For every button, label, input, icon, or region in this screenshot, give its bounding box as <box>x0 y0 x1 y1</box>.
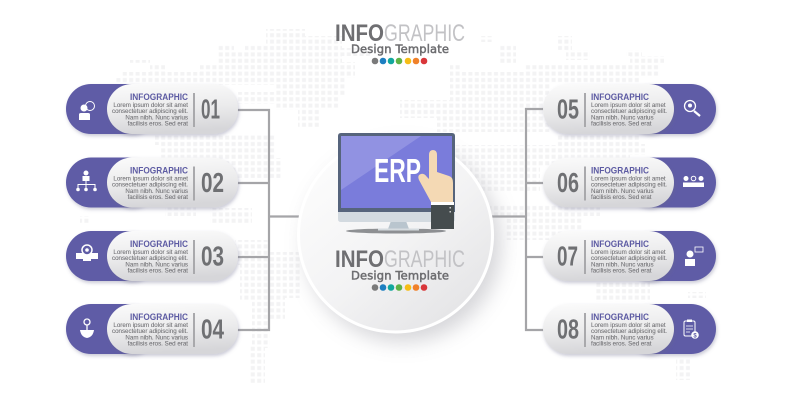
ERP label: ERP <box>374 152 421 189</box>
text block: INFOGRAPHIC <box>591 239 649 249</box>
icon: person with speech bubble <box>685 247 703 266</box>
icon: team with target <box>76 245 98 261</box>
text block <box>591 239 667 274</box>
panel: step 05 <box>543 84 716 134</box>
text block: facilisis eros. Sed erat <box>591 267 652 274</box>
title inside disc <box>335 246 465 291</box>
text block: INFOGRAPHIC <box>591 166 649 176</box>
text block: consectetuer adipiscing elit. <box>591 108 667 115</box>
title inside disc: Design Template <box>351 268 449 282</box>
panel: step 01 <box>66 84 238 134</box>
text block: consectetuer adipiscing elit. <box>112 108 188 115</box>
text block: consectetuer adipiscing elit. <box>591 182 667 188</box>
icon: clipboard with coin <box>684 320 699 339</box>
text block: Nam nibh. Nunc varius <box>591 114 654 121</box>
panel: step 02 <box>66 158 238 208</box>
connector lines: right tree <box>490 109 547 330</box>
title inside disc: GRAPHIC <box>384 246 465 273</box>
text block: Lorem ipsum dolor sit amet <box>591 176 666 182</box>
text block: Nam nibh. Nunc varius <box>591 188 654 195</box>
top title: Design Template <box>351 42 449 56</box>
text block: INFOGRAPHIC <box>130 166 188 176</box>
text block <box>112 92 188 127</box>
text block: consectetuer adipiscing elit. <box>112 182 188 188</box>
text block: consectetuer adipiscing elit. <box>112 328 188 335</box>
text block <box>591 92 667 127</box>
text block <box>591 312 667 347</box>
text block: Nam nibh. Nunc varius <box>125 334 188 341</box>
text block <box>112 239 188 274</box>
icon: org chart <box>76 170 97 191</box>
connector lines: left tree <box>236 110 300 330</box>
text block <box>112 166 188 201</box>
panel: step 08 <box>543 304 716 354</box>
number: 03 <box>201 240 224 272</box>
text block: consectetuer adipiscing elit. <box>112 255 188 262</box>
number: 05 <box>557 94 579 124</box>
panel: step 04 <box>66 304 238 354</box>
text block: INFOGRAPHIC <box>591 92 649 102</box>
top title: GRAPHIC <box>384 20 465 47</box>
top title <box>335 20 465 64</box>
panel: step 06 <box>543 158 716 208</box>
number: 06 <box>557 167 579 198</box>
text block: Lorem ipsum dolor sit amet <box>591 102 666 109</box>
text block: Nam nibh. Nunc varius <box>125 188 188 195</box>
text block: Nam nibh. Nunc varius <box>591 261 654 268</box>
text block: Lorem ipsum dolor sit amet <box>113 176 188 182</box>
central disc <box>297 136 501 342</box>
number: 01 <box>201 94 220 124</box>
colour dots <box>372 284 427 291</box>
panel: step 07 <box>543 231 716 281</box>
text block: facilisis eros. Sed erat <box>591 194 652 201</box>
text block: Nam nibh. Nunc varius <box>125 261 188 268</box>
text block: Lorem ipsum dolor sit amet <box>113 249 188 256</box>
monitor with ERP screen <box>338 133 455 234</box>
number: 04 <box>201 314 224 344</box>
number: 08 <box>557 314 579 344</box>
text block: facilisis eros. Sed erat <box>127 120 188 127</box>
top title: INFO <box>335 20 384 47</box>
icon: magnifier <box>684 100 700 116</box>
text block <box>591 166 667 201</box>
title inside disc: INFO <box>335 246 384 273</box>
text block: INFOGRAPHIC <box>591 312 649 322</box>
text block: facilisis eros. Sed erat <box>591 120 652 127</box>
text block: facilisis eros. Sed erat <box>127 340 188 347</box>
text block: Lorem ipsum dolor sit amet <box>113 322 188 329</box>
text block: Nam nibh. Nunc varius <box>591 334 654 341</box>
icon: clipboard with coin: $ <box>693 333 697 339</box>
text block <box>112 312 188 347</box>
text block: INFOGRAPHIC <box>130 239 188 249</box>
number: 07 <box>557 240 578 272</box>
text block: INFOGRAPHIC <box>130 312 188 322</box>
colour dots <box>372 58 427 64</box>
background dotted world map <box>80 29 706 385</box>
icon: three people <box>683 176 704 187</box>
icon: map pin with globe <box>80 319 94 338</box>
icon: person with globe <box>79 102 94 120</box>
panel: step 03 <box>66 231 238 281</box>
text block: Lorem ipsum dolor sit amet <box>113 102 188 109</box>
text block: Lorem ipsum dolor sit amet <box>591 322 666 329</box>
number: 02 <box>201 167 224 198</box>
icon: pointing hand <box>418 150 454 229</box>
text block: consectetuer adipiscing elit. <box>591 255 667 262</box>
text block: consectetuer adipiscing elit. <box>591 328 667 335</box>
text block: facilisis eros. Sed erat <box>127 267 188 274</box>
text block: Nam nibh. Nunc varius <box>125 114 188 121</box>
text block: facilisis eros. Sed erat <box>591 340 652 347</box>
text block: Lorem ipsum dolor sit amet <box>591 249 666 256</box>
text block: facilisis eros. Sed erat <box>127 194 188 201</box>
text block: INFOGRAPHIC <box>130 92 188 102</box>
